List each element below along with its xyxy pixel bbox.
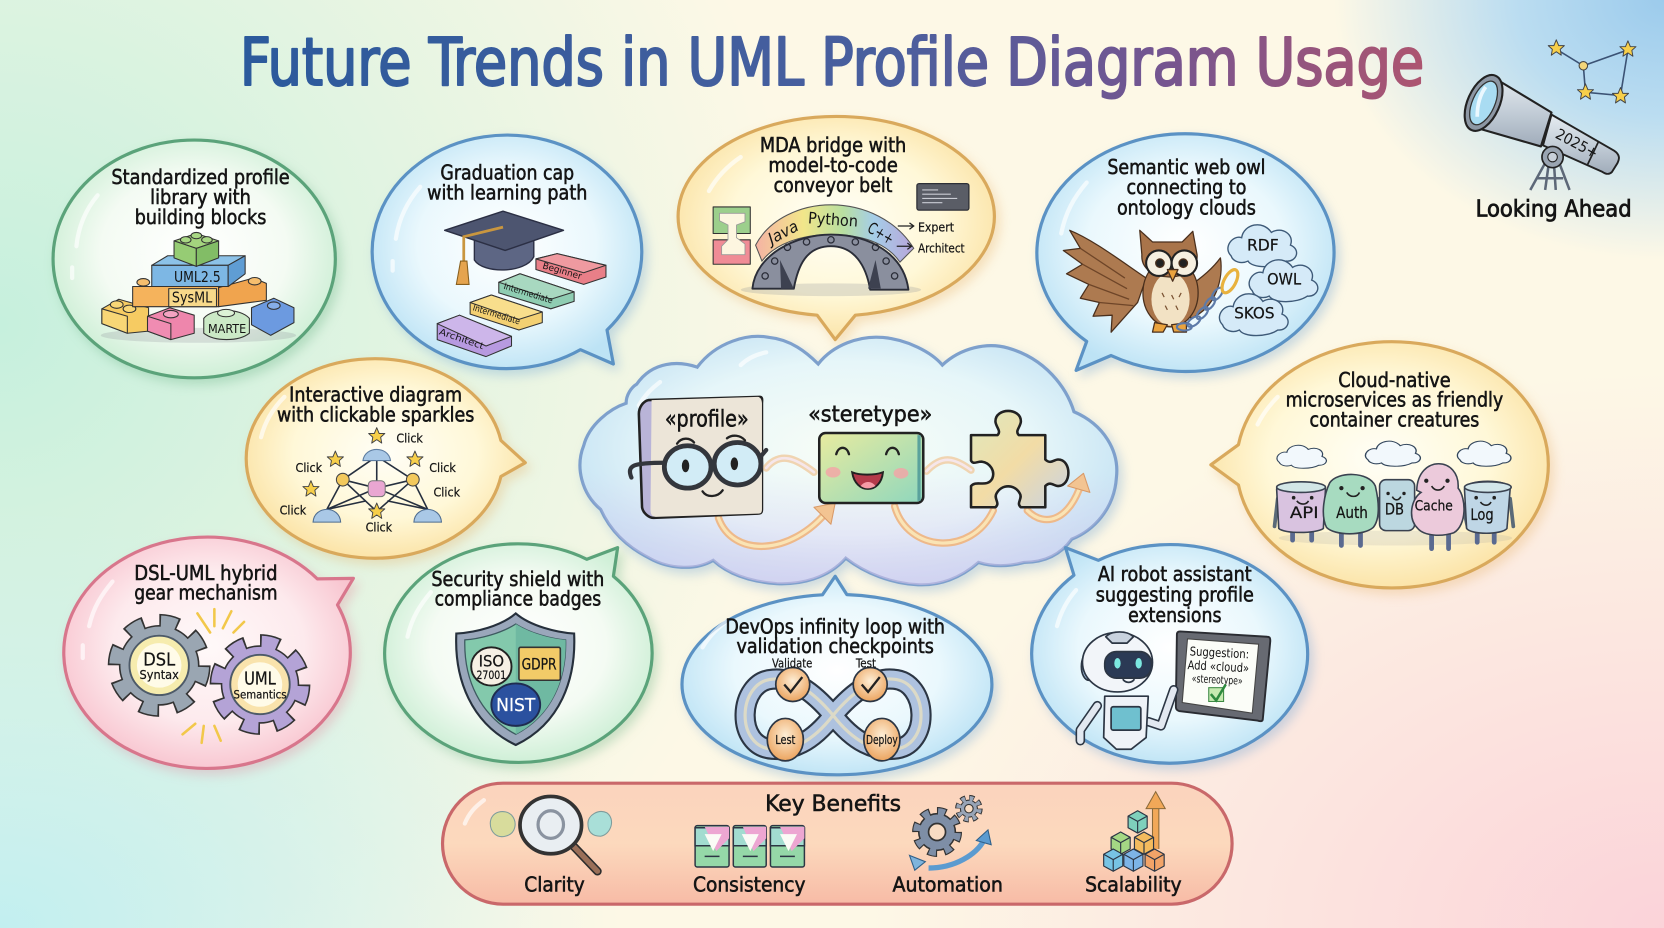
icon: compliance shield: ISO bbox=[479, 651, 504, 670]
heading: container creatures bbox=[1310, 408, 1479, 432]
icon: container creatures: API bbox=[1290, 503, 1319, 522]
icon: building blocks: SysML bbox=[172, 288, 213, 306]
bubble bbox=[678, 116, 994, 340]
heading bbox=[1286, 368, 1503, 432]
bubble bbox=[53, 140, 335, 378]
checkpoint labels bbox=[772, 657, 898, 748]
icon: infinity loop bbox=[745, 679, 921, 750]
caption: looking ahead: Looking Ahead bbox=[1476, 194, 1632, 222]
heading: Security shield with bbox=[431, 567, 604, 591]
arrows between characters bbox=[718, 458, 1090, 546]
icon: building blocks bbox=[101, 232, 296, 343]
heading bbox=[431, 567, 604, 610]
click labels: Click bbox=[429, 461, 456, 476]
panel: graduation cap learning path bbox=[372, 135, 642, 369]
heading: with clickable sparkles bbox=[277, 402, 474, 426]
click labels: Click bbox=[434, 486, 460, 501]
checkpoint labels: Test bbox=[855, 657, 877, 672]
chart: clickable network bbox=[303, 428, 441, 522]
icon: learning path steps: Architect bbox=[438, 327, 485, 352]
bubble bbox=[64, 537, 353, 768]
icon: container creatures: Log bbox=[1470, 505, 1494, 524]
icon: tablet: «stereotype» bbox=[1191, 672, 1243, 688]
icon: UML gear: Semantics bbox=[233, 687, 287, 701]
heading bbox=[725, 615, 945, 658]
icon: learning path steps bbox=[437, 254, 606, 357]
click labels: Click bbox=[366, 521, 392, 536]
heading: validation checkpoints bbox=[736, 634, 934, 658]
icon: chain link bbox=[1177, 267, 1241, 331]
benefit: consistency bbox=[693, 826, 806, 896]
benefit: clarity bbox=[490, 796, 612, 896]
icon: robot bbox=[1080, 632, 1174, 749]
icon: container creatures: Auth bbox=[1336, 503, 1368, 522]
benefit: automation bbox=[892, 799, 1003, 896]
heading: connecting to bbox=[1126, 175, 1246, 199]
icon: DSL gear bbox=[118, 624, 201, 707]
checkpoint labels: Deploy bbox=[866, 733, 898, 748]
heading: Semantic web owl bbox=[1107, 155, 1266, 179]
click labels bbox=[280, 432, 460, 536]
panel: AI robot bbox=[1032, 545, 1308, 763]
bubble bbox=[1211, 342, 1548, 588]
heading: microservices as friendly bbox=[1286, 387, 1503, 411]
icon: UML gear bbox=[220, 644, 300, 725]
icon: building blocks: UML2.5 bbox=[174, 268, 221, 286]
character: puzzle piece bbox=[971, 411, 1068, 507]
icon: container creatures: Cache bbox=[1415, 498, 1453, 514]
icon: DSL gear: Syntax bbox=[140, 668, 179, 683]
icon: compliance shield: NIST bbox=[496, 695, 535, 716]
bubble bbox=[1037, 134, 1334, 371]
icon: owl bbox=[1063, 230, 1221, 332]
icon: graduation cap bbox=[445, 211, 564, 284]
cloud labels bbox=[1234, 235, 1301, 322]
bubble bbox=[682, 576, 992, 775]
icon: container creatures: DB bbox=[1385, 500, 1404, 519]
checkpoint labels: Lest bbox=[775, 733, 796, 748]
panel: central cloud bbox=[580, 336, 1117, 585]
icon: DSL gear: DSL bbox=[143, 649, 175, 670]
heading: DSL-UML hybrid bbox=[134, 561, 278, 585]
icon: ontology clouds bbox=[1219, 225, 1318, 336]
outputs: expert and architect: Expert bbox=[918, 220, 955, 235]
heading: compliance badges bbox=[435, 586, 601, 610]
icon: telescope bbox=[1457, 69, 1619, 190]
heading: Interactive diagram bbox=[289, 383, 462, 407]
bubble bbox=[372, 135, 642, 369]
outputs: expert and architect bbox=[897, 220, 965, 257]
icon: learning path steps: Intermediate bbox=[502, 282, 554, 306]
heading: suggesting profile bbox=[1096, 583, 1254, 607]
icon: code monitor bbox=[917, 184, 969, 210]
heading bbox=[760, 133, 906, 197]
panel: standardized profile library bbox=[53, 140, 335, 378]
icon: bridge with conveyor belt: Java bbox=[762, 216, 802, 250]
panel: DevOps infinity loop bbox=[682, 576, 992, 775]
icon: telescope: 2025+ bbox=[1552, 125, 1601, 162]
character: stereotype card bbox=[808, 401, 932, 503]
click labels: Click bbox=[296, 461, 322, 476]
icon: tablet: Add «cloud» bbox=[1187, 658, 1249, 675]
panel: security shield bbox=[385, 544, 652, 762]
bubble bbox=[385, 544, 652, 762]
icon: compliance shield: 27001 bbox=[476, 668, 506, 682]
heading bbox=[277, 383, 474, 426]
character: profile card bbox=[630, 397, 766, 518]
character: profile card: «profile» bbox=[665, 405, 749, 433]
icon: learning path steps: Beginner bbox=[541, 262, 583, 282]
icon: sparks bbox=[183, 609, 244, 743]
heading: MDA bridge with bbox=[760, 133, 906, 157]
title: Future Trends in UML Profile Diagram Usage bbox=[240, 24, 1424, 101]
heading: library with bbox=[150, 185, 251, 209]
checkpoints bbox=[767, 668, 900, 761]
benefit: scalability bbox=[1085, 792, 1182, 896]
heading bbox=[1096, 562, 1254, 627]
heading: AI robot assistant bbox=[1098, 562, 1252, 586]
character: stereotype card: «steretype» bbox=[808, 401, 932, 427]
panel: semantic web owl bbox=[1037, 134, 1334, 371]
heading: extensions bbox=[1128, 603, 1221, 627]
benefit: scalability: Scalability bbox=[1085, 872, 1182, 896]
panel: key benefits bbox=[443, 783, 1232, 904]
heading: conveyor belt bbox=[774, 173, 892, 197]
icon: tablet bbox=[1176, 631, 1270, 721]
heading: Cloud-native bbox=[1338, 368, 1451, 392]
heading bbox=[1107, 155, 1266, 219]
icon: constellation bbox=[1548, 40, 1636, 103]
icon: small clouds bbox=[1277, 441, 1511, 468]
click labels: Click bbox=[396, 432, 423, 447]
benefit: clarity: Clarity bbox=[524, 872, 585, 896]
cloud labels: OWL bbox=[1267, 269, 1301, 288]
panel: interactive diagram bbox=[246, 359, 525, 558]
panel: looking ahead telescope bbox=[1457, 40, 1636, 222]
heading: DevOps infinity loop with bbox=[725, 615, 945, 639]
cloud labels: SKOS bbox=[1234, 303, 1275, 322]
icon: UML gear: UML bbox=[244, 668, 276, 689]
panel: cloud-native microservices bbox=[1211, 342, 1548, 588]
heading: ontology clouds bbox=[1117, 195, 1256, 219]
icon: bridge with conveyor belt: C++ bbox=[864, 218, 898, 248]
outputs: expert and architect: Architect bbox=[918, 242, 965, 257]
icon: bridge with conveyor belt bbox=[741, 205, 921, 296]
click labels: Click bbox=[280, 504, 307, 519]
icon: model blocks bbox=[713, 207, 750, 264]
icon: building blocks: MARTE bbox=[208, 322, 246, 337]
heading bbox=[134, 561, 278, 605]
icon: compliance shield: GDPR bbox=[522, 655, 557, 674]
heading: building blocks bbox=[135, 205, 266, 229]
heading: Key Benefits bbox=[765, 791, 901, 817]
bubble bbox=[246, 359, 525, 558]
panel: DSL-UML gears bbox=[64, 537, 353, 768]
icon: compliance shield bbox=[456, 613, 574, 745]
checkpoint labels: Validate bbox=[772, 657, 812, 672]
cloud shape bbox=[580, 336, 1117, 585]
icon: container creatures bbox=[1275, 464, 1513, 549]
heading: Standardized profile bbox=[111, 165, 290, 189]
heading bbox=[111, 165, 290, 229]
heading: model-to-code bbox=[768, 153, 898, 177]
benefit: automation: Automation bbox=[892, 872, 1003, 896]
cloud labels: RDF bbox=[1247, 235, 1279, 254]
benefit: consistency: Consistency bbox=[693, 872, 806, 896]
panel: MDA bridge bbox=[678, 116, 994, 340]
icon: bridge with conveyor belt: Python bbox=[808, 208, 859, 231]
icon: learning path steps: Intermediate bbox=[471, 303, 521, 327]
bubble bbox=[1032, 545, 1308, 763]
heading bbox=[427, 160, 587, 205]
band bbox=[443, 783, 1232, 904]
heading: with learning path bbox=[427, 181, 587, 205]
heading: Graduation cap bbox=[440, 160, 574, 184]
icon: tablet: Suggestion: bbox=[1189, 644, 1249, 661]
heading: gear mechanism bbox=[134, 581, 278, 605]
